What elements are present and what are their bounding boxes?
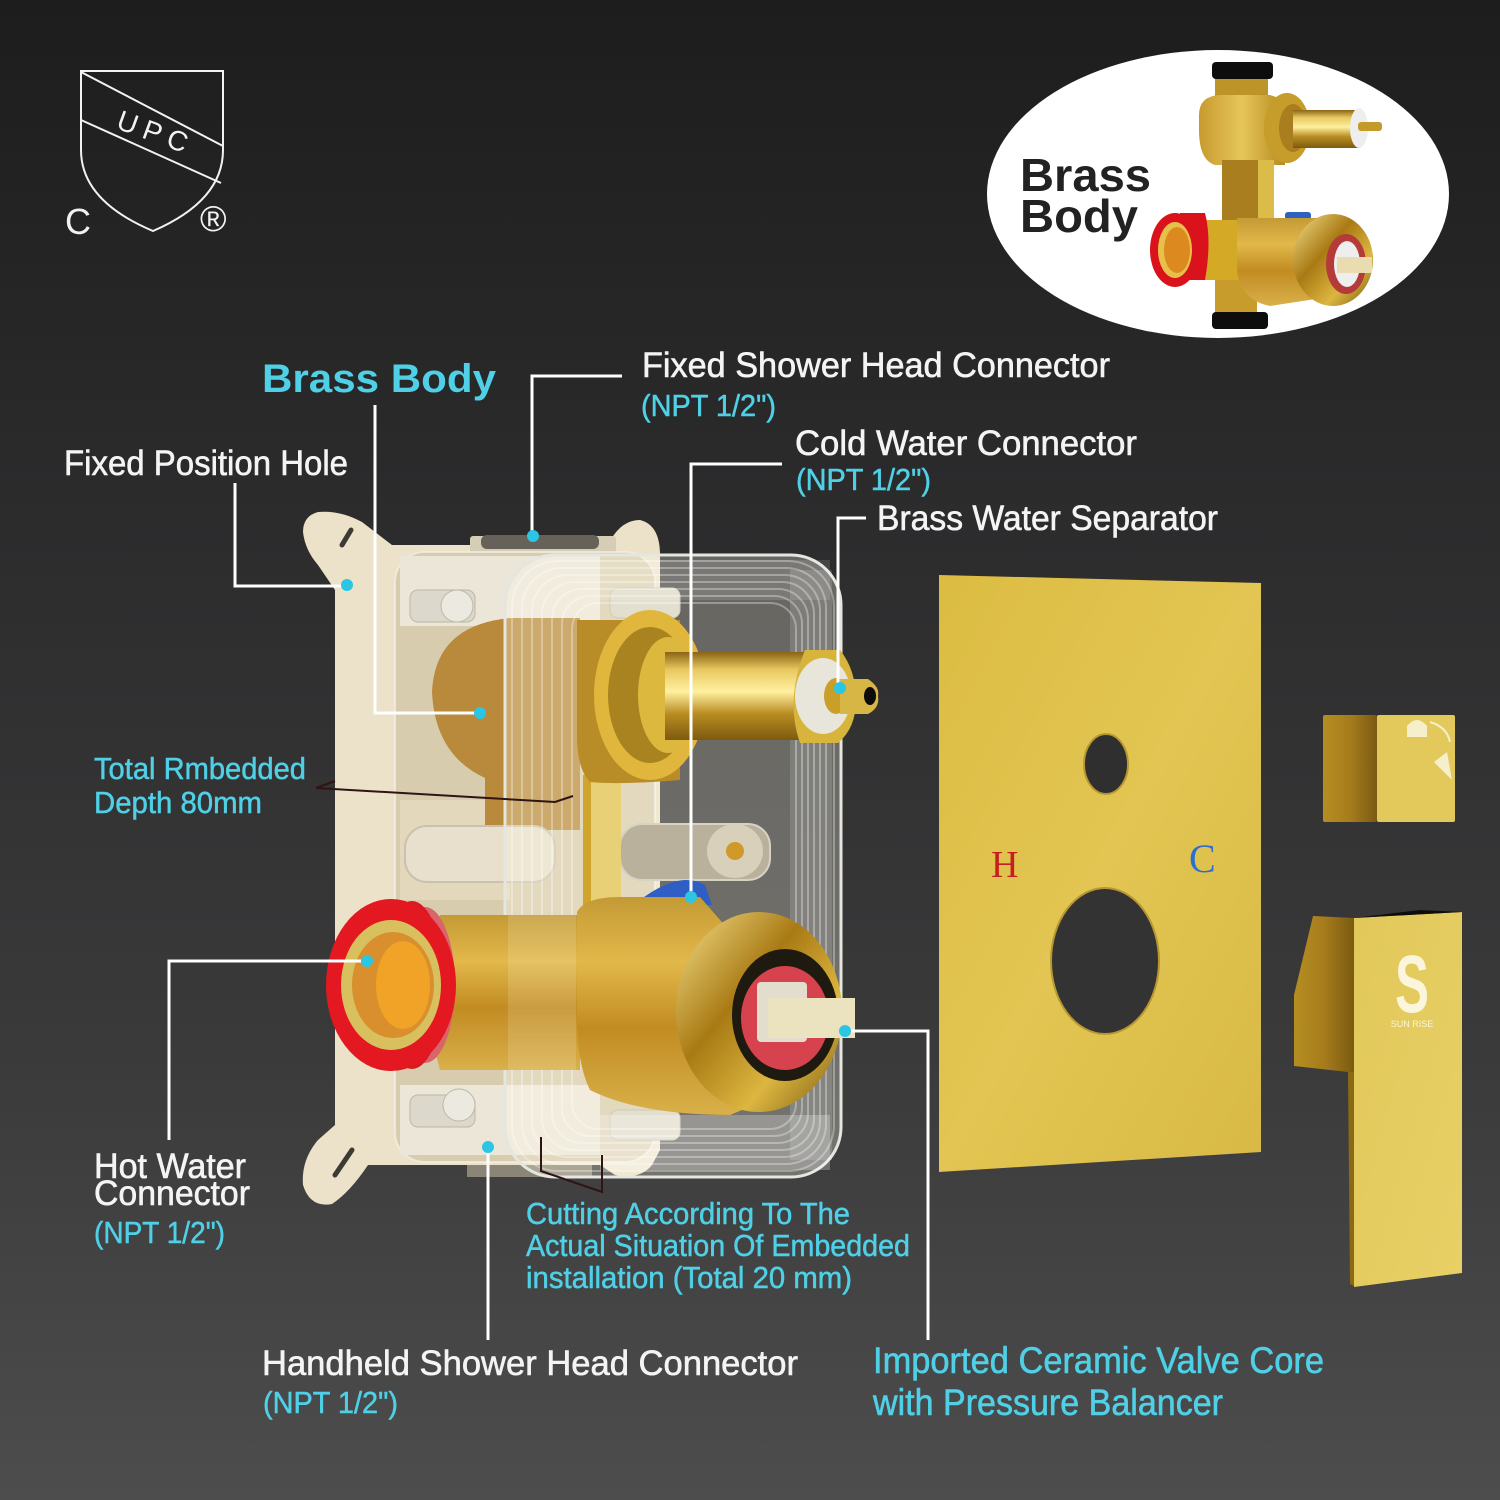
logo: UPC certification shield [65, 71, 227, 242]
callout: brass body [262, 357, 497, 719]
callout: handheld shower head connector [262, 1141, 798, 1420]
rear clear box [395, 552, 655, 1162]
callout: cutting note: Actual Situation Of Embedded [526, 1228, 910, 1263]
callout: fixed position hole [64, 444, 353, 591]
panel: exploded valve box [303, 512, 878, 1205]
callout: cutting note [526, 1196, 910, 1295]
inset brass valve drawing [1150, 62, 1382, 329]
long stem [665, 652, 830, 740]
callout: hot water connector: Connector [94, 1174, 250, 1213]
callout: fixed shower head connector: Fixed Shower Head Connector [642, 346, 1110, 385]
front clear box [505, 555, 841, 1177]
callout: cold water connector: (NPT 1/2") [796, 462, 931, 497]
callout: handheld shower head connector: Handheld Shower Head Connector [262, 1344, 798, 1383]
large hole [1051, 888, 1159, 1034]
lower brass body [577, 897, 790, 1115]
callout: ceramic valve core [839, 1025, 1324, 1423]
small hole [1084, 734, 1128, 794]
top connector [470, 535, 616, 556]
hot water pipe [430, 915, 580, 1070]
letter C: C [1189, 836, 1216, 881]
blue o-ring [640, 880, 712, 905]
clear tube right [620, 824, 770, 880]
dark depth leaders [316, 781, 602, 1192]
inset heading: Body [1020, 190, 1138, 242]
brand mark: SUN RISE [1391, 1019, 1433, 1029]
bottom connector [467, 1155, 592, 1177]
brand mark: S [1395, 939, 1429, 1030]
box ribs [512, 561, 834, 1171]
callout: brass water separator: Brass Water Separator [877, 499, 1218, 538]
callout: hot water connector: Hot Water [94, 1147, 246, 1186]
upper brass ring [594, 610, 706, 780]
brass riser column [583, 775, 621, 905]
callout: cutting note: Cutting According To The [526, 1196, 850, 1231]
callout: embedded depth: Total Rmbedded [94, 751, 306, 786]
brass dome behind box [432, 618, 580, 830]
callout: fixed shower head connector: (NPT 1/2") [641, 388, 776, 423]
brand mark [1391, 939, 1433, 1030]
glass band over hot water pipe [508, 915, 576, 1070]
logo: UPC certification shield: ® [200, 198, 227, 239]
hot water red connector [326, 899, 456, 1071]
logo: UPC certification shield: C [65, 201, 91, 242]
callout: brass body: Brass Body [262, 357, 497, 401]
stem hex end [794, 650, 878, 743]
inset heading: Brass [1020, 149, 1151, 201]
logo: UPC certification shield: UPC [113, 105, 199, 161]
panel: trim plate [939, 575, 1261, 1172]
valve core cap [676, 912, 842, 1112]
callout: ceramic valve core: Imported Ceramic Valve Core [873, 1340, 1324, 1381]
callout: embedded depth [94, 751, 306, 820]
callout: cold water connector: Cold Water Connector [795, 424, 1137, 463]
icon: diverter knob [1323, 715, 1455, 822]
rear screws [410, 588, 680, 1140]
callout: fixed position hole: Fixed Position Hole [64, 444, 348, 483]
callout: ceramic valve core: with Pressure Balancer [872, 1382, 1223, 1423]
callout: embedded depth: Depth 80mm [94, 785, 262, 820]
mounting plate [303, 512, 660, 1205]
icon: valve handle [1294, 910, 1462, 1287]
callout: cutting note: installation (Total 20 mm) [526, 1260, 852, 1295]
callout: fixed shower head connector [527, 346, 1110, 542]
upper brass body [577, 620, 680, 783]
callout: handheld shower head connector: (NPT 1/2") [263, 1385, 398, 1420]
callout: hot water connector [94, 955, 373, 1250]
callout: cold water connector [685, 424, 1137, 903]
valve core handle [768, 998, 855, 1038]
panel: brass body inset [987, 50, 1449, 338]
letter H: H [991, 844, 1018, 886]
callout: brass water separator [834, 499, 1218, 694]
clear tube left [405, 826, 555, 882]
callout: hot water connector: (NPT 1/2") [94, 1215, 225, 1250]
